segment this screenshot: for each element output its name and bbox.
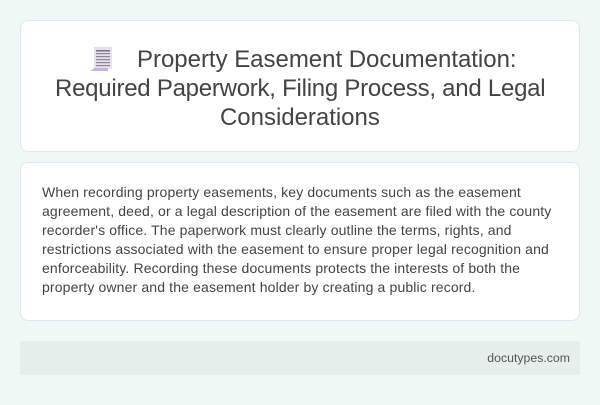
title heading: Required Paperwork, Filing Process, and Legal: [55, 75, 545, 102]
footer source text: docutypes.com: [487, 351, 570, 365]
description text: [42, 184, 552, 295]
description text: restrictions associated with the easement to ensure proper legal recognition and: [42, 241, 549, 257]
title heading: [55, 46, 545, 131]
description panel: [20, 162, 580, 321]
title panel: [20, 20, 580, 152]
description text: agreement, deed, or a legal description of the easement are filed with the county: [42, 203, 551, 219]
title heading: Property Easement Documentation:: [137, 46, 517, 73]
description text: When recording property easements, key documents such as the easement: [42, 184, 521, 200]
description text: enforceability. Recording these documents protects the interests of both the: [42, 260, 520, 276]
title heading: Considerations: [220, 104, 380, 131]
icon: document scroll: [91, 47, 112, 71]
footer bar: [20, 341, 580, 375]
description text: property owner and the easement holder by creating a public record.: [42, 279, 476, 295]
description text: recorder's office. The paperwork must clearly outline the terms, rights, and: [42, 222, 512, 238]
